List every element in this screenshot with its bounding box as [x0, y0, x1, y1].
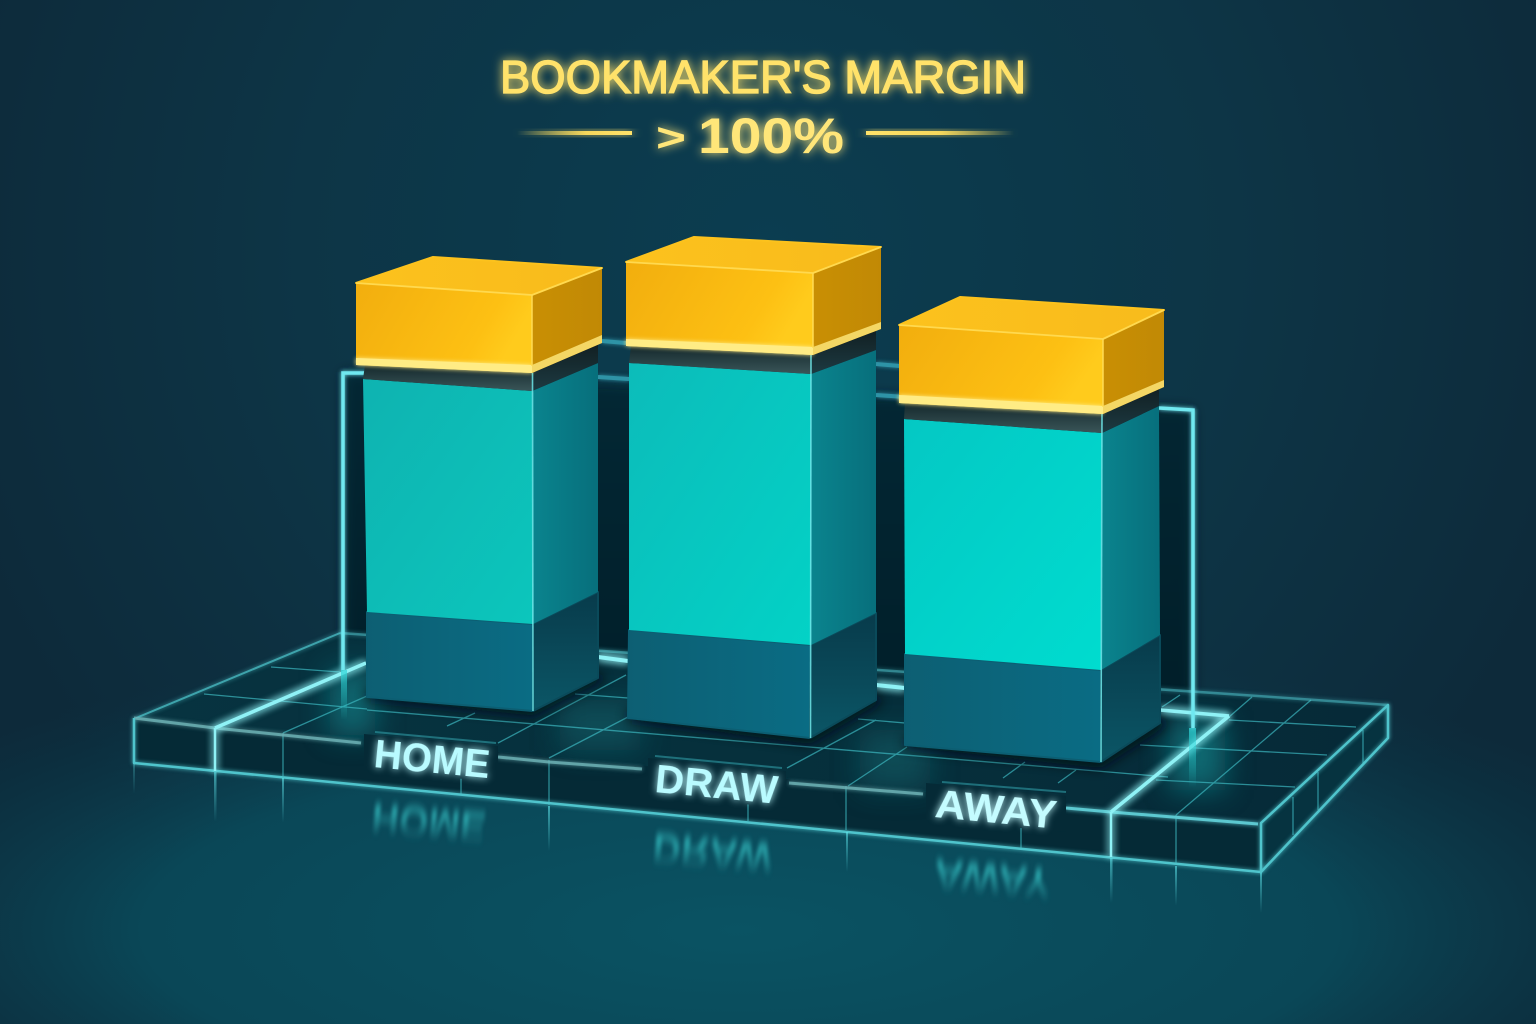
reflected lines on floor — [133, 670, 1262, 913]
label text: DRAW — [653, 757, 780, 813]
label: draw — [648, 756, 786, 879]
label reflection: DRAW — [651, 825, 775, 879]
label reflection: HOME — [370, 795, 487, 849]
bar: away — [899, 297, 1166, 768]
grid lines — [204, 667, 1363, 864]
teal segment — [904, 406, 1160, 670]
label top edge — [655, 756, 782, 768]
label backing — [926, 783, 1066, 832]
label text: AWAY — [933, 782, 1059, 838]
edge highlight — [532, 373, 534, 711]
divider: right rule — [866, 131, 1014, 135]
back frame panel — [343, 372, 1193, 720]
frame right post — [1159, 408, 1193, 728]
edge highlight — [1101, 414, 1102, 762]
label top edge — [375, 732, 496, 743]
base segment — [628, 613, 876, 738]
shadow gap — [904, 387, 1159, 433]
bright frame feet — [215, 657, 1229, 857]
label backing — [648, 758, 786, 808]
platform — [133, 633, 1388, 913]
label backing — [364, 734, 498, 782]
frame rear rails — [598, 341, 905, 397]
contact shadow — [628, 694, 882, 744]
title — [500, 51, 1026, 164]
base segment — [367, 592, 598, 711]
label text: HOME — [372, 732, 492, 787]
bar: home — [356, 257, 604, 716]
back frame lines — [343, 341, 1193, 728]
label top edge — [942, 782, 1066, 792]
value: greater than 100 percent: 100% — [698, 108, 844, 164]
heading: bookmaker's margin: BOOKMAKER'S MARGIN — [500, 51, 1026, 103]
label reflection: AWAY — [932, 851, 1054, 905]
contact shadow — [905, 716, 1166, 768]
gold margin block — [356, 257, 602, 373]
frame left post — [343, 373, 367, 670]
platform faces — [134, 633, 1388, 872]
label: home — [364, 732, 498, 849]
value: greater than 100 percent: > — [656, 116, 686, 160]
shadow gap — [363, 343, 598, 391]
floor glows — [330, 670, 1225, 790]
gold margin block — [899, 297, 1164, 414]
label: away — [926, 782, 1066, 905]
divider: left rule — [517, 131, 632, 135]
teal segment — [363, 363, 598, 624]
contact shadow — [367, 672, 604, 716]
shadow gap — [629, 329, 876, 374]
base segment — [905, 635, 1160, 762]
platform outline — [134, 633, 1388, 872]
edge highlight — [810, 355, 812, 738]
value: greater than 100 percent — [656, 108, 844, 164]
gold margin block — [626, 237, 881, 355]
bar: draw — [626, 237, 882, 744]
teal segment — [629, 350, 876, 645]
